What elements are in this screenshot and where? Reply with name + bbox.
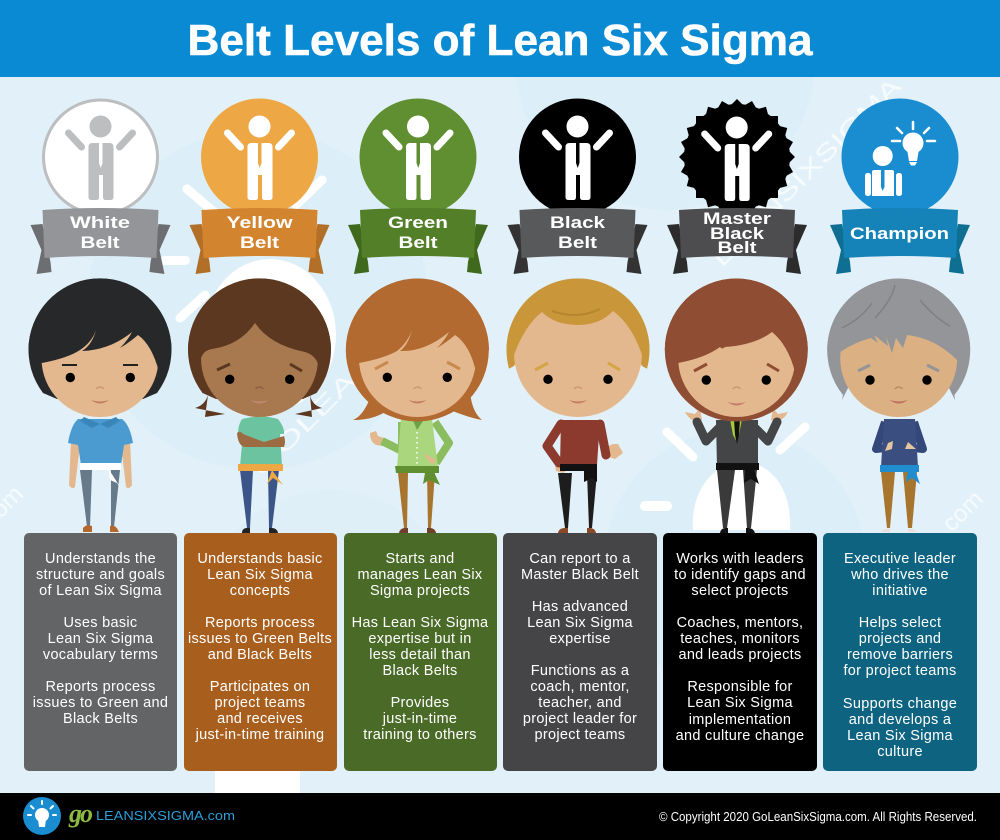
badge: Master Black Belt: Black — [710, 224, 765, 243]
icon: logo lightbulb — [23, 797, 61, 835]
panel: Yellow Belt description: and Black Belts — [208, 647, 312, 663]
panel: Black Belt description: Functions as a — [531, 663, 630, 679]
panel: Master Black Belt description: Lean Six Sigma — [687, 695, 794, 711]
panel: White Belt description: issues to Green and — [33, 695, 168, 711]
panel: White Belt description: Lean Six Sigma — [48, 631, 154, 647]
panel: Yellow Belt description: concepts — [230, 583, 290, 599]
character: White Belt — [28, 278, 172, 532]
panel: Master Black Belt description — [663, 533, 817, 771]
panel: Yellow Belt description: Understands basic — [197, 551, 323, 567]
panel: Black Belt description: Master Black Belt — [521, 567, 639, 583]
panel: Black Belt description: project teams — [535, 727, 625, 743]
character: Champion — [827, 278, 970, 532]
panel: Green Belt description: expertise but in — [368, 631, 472, 647]
panel: Black Belt description: Can report to a — [529, 551, 631, 567]
panel: Green Belt description: Provides — [391, 695, 449, 711]
character: Yellow Belt — [188, 278, 331, 533]
panel: Champion description: remove barriers — [847, 647, 953, 663]
panel: Champion description: Executive leader — [844, 551, 956, 567]
panel: Yellow Belt description — [184, 533, 337, 771]
badge: Yellow Belt — [190, 98, 330, 274]
panel: Champion description: projects and — [859, 631, 941, 647]
panel: White Belt description: vocabulary terms — [43, 647, 158, 663]
badge: Green Belt — [348, 98, 488, 274]
panel: Green Belt description: training to others — [363, 727, 477, 743]
panel: Black Belt description: teacher, and — [538, 695, 622, 711]
panel: Green Belt description: Sigma projects — [370, 583, 470, 599]
panel: Yellow Belt description: Lean Six Sigma — [207, 567, 314, 583]
badge: White Belt — [30, 100, 170, 274]
badge: White Belt: White — [70, 213, 130, 232]
panel: Champion description: culture — [877, 744, 923, 760]
panel: Green Belt description: just-in-time — [382, 711, 457, 727]
title: Belt Levels of Lean Six Sigma — [188, 16, 813, 65]
badge: Champion — [830, 98, 970, 274]
panel: Black Belt description: project leader for — [523, 711, 637, 727]
panel: Master Black Belt description: implementation — [689, 712, 791, 728]
panel: Yellow Belt description: issues to Green Belts — [188, 631, 332, 647]
panel: Master Black Belt description: teaches, monitors — [680, 631, 800, 647]
panel: Champion description: Lean Six Sigma — [847, 728, 954, 744]
panel: Black Belt description: expertise — [549, 631, 611, 647]
badge: Master Black Belt — [667, 99, 807, 274]
panel: Champion description: initiative — [872, 583, 928, 599]
panel: Master Black Belt description: to identify gaps and — [674, 567, 806, 583]
panel: White Belt description: Reports process — [45, 679, 156, 695]
panel: Champion description: Supports change — [843, 696, 957, 712]
panel: White Belt description: Understands the — [45, 551, 156, 567]
character: Green Belt — [346, 278, 489, 533]
panel: White Belt description: Uses basic — [64, 615, 137, 631]
text: com — [937, 486, 989, 537]
logo wordmark: go — [68, 799, 93, 828]
badge: Master Black Belt: Master — [703, 209, 771, 228]
panel: Master Black Belt description: Coaches, mentors, — [677, 615, 803, 631]
panel: Green Belt description: Starts and — [385, 551, 455, 567]
badge: Black Belt: Belt — [558, 233, 597, 252]
panel: Master Black Belt description: and culture change — [676, 728, 804, 744]
panel: Yellow Belt description: Participates on — [210, 679, 310, 695]
badge: White Belt: Belt — [80, 233, 120, 252]
badge: Black Belt: Black — [550, 213, 606, 232]
text: GOLEANS — [247, 329, 401, 482]
panel: Green Belt description — [344, 533, 497, 771]
badge: Black Belt — [508, 98, 648, 274]
text: LEANSIXSIGMA — [707, 73, 907, 272]
badge: Green Belt: Green — [388, 213, 448, 232]
panel: Master Black Belt description: select projects — [691, 583, 789, 599]
badge: Yellow Belt: Yellow — [226, 213, 293, 232]
panel: White Belt description: structure and goals — [36, 567, 165, 583]
badge: Champion: Champion — [850, 224, 949, 243]
panel: Yellow Belt description: just-in-time training — [195, 727, 324, 743]
panel: Champion description: for project teams — [843, 663, 957, 679]
panel: Champion description: and develops a — [849, 712, 952, 728]
panel: Yellow Belt description: Reports process — [205, 615, 315, 631]
panel: Green Belt description: manages Lean Six — [358, 567, 483, 583]
panel: Yellow Belt description: project teams — [215, 695, 305, 711]
panel: Champion description: who drives the — [850, 567, 949, 583]
panel: Master Black Belt description: Responsible for — [687, 679, 793, 695]
panel: Black Belt description — [503, 533, 657, 771]
panel: Yellow Belt description: and receives — [217, 711, 303, 727]
panel: Green Belt description: less detail than — [369, 647, 471, 663]
character: Master Black Belt — [665, 278, 808, 533]
panel: Champion description: Helps select — [859, 615, 941, 631]
panel: White Belt description: of Lean Six Sigma — [39, 583, 163, 599]
panel: Black Belt description: Lean Six Sigma — [527, 615, 634, 631]
footer bar — [0, 793, 1000, 840]
panel: Master Black Belt description: and leads projects — [678, 647, 802, 663]
panel: Green Belt description: Black Belts — [382, 663, 458, 679]
panel: Black Belt description: Has advanced — [532, 599, 628, 615]
copyright: © Copyright 2020 GoLeanSixSigma.com. All Rights Reserved. — [659, 810, 977, 824]
character: Black Belt — [506, 278, 650, 533]
panel: White Belt description: Black Belts — [63, 711, 138, 727]
panel: White Belt description — [24, 533, 177, 771]
badge: Green Belt: Belt — [398, 233, 438, 252]
panel: Master Black Belt description: Works with leaders — [676, 551, 804, 567]
badge: Yellow Belt: Belt — [240, 233, 279, 252]
badge: Master Black Belt: Belt — [718, 238, 757, 257]
footer bar: LEANSIXSIGMA.com — [96, 808, 235, 823]
panel: Black Belt description: coach, mentor, — [530, 679, 630, 695]
panel: Green Belt description: Has Lean Six Sigma — [352, 615, 489, 631]
panel: Champion description — [823, 533, 977, 771]
header bar — [0, 0, 1000, 77]
